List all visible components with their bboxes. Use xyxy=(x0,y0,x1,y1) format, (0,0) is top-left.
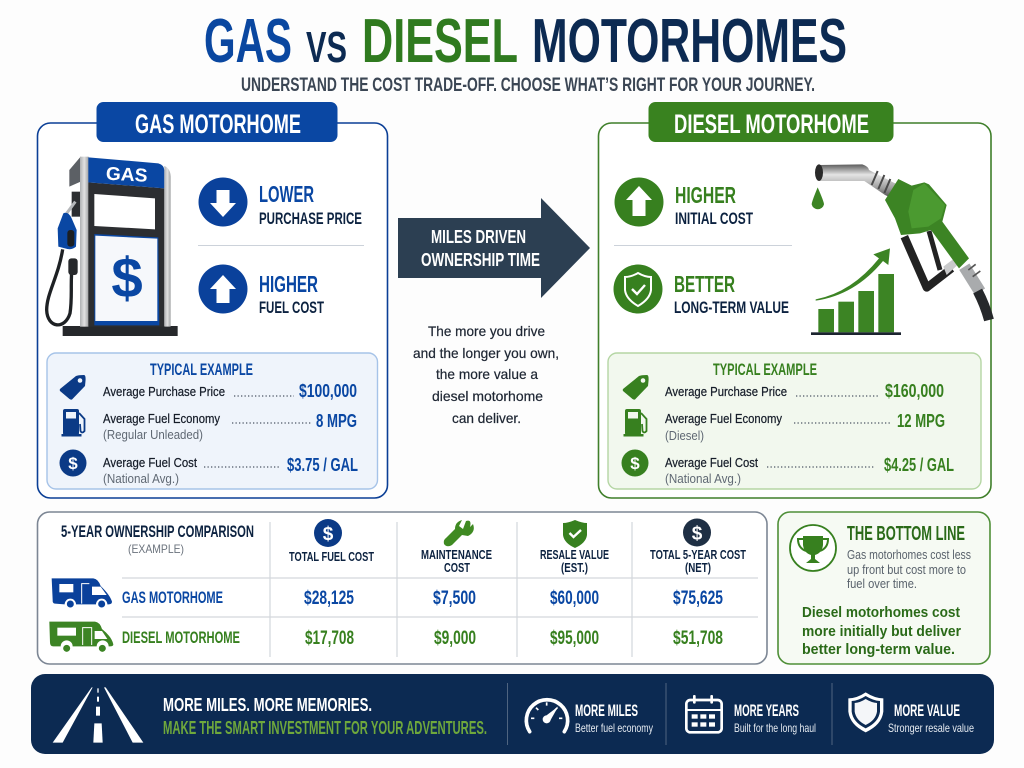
gas typical example box xyxy=(47,353,378,489)
row: gas motorhome: $60,000 xyxy=(550,587,599,609)
column: resale value: (EST.) xyxy=(561,561,588,575)
benefit: lower purchase price: LOWER xyxy=(259,181,314,207)
feature: more miles: Better fuel economy xyxy=(575,721,653,735)
row: purchase price: Average Purchase Price xyxy=(103,384,225,399)
text block: explanation: the more value a xyxy=(436,366,538,382)
text block: diesel summary xyxy=(802,604,961,658)
footer message xyxy=(163,695,487,738)
icon: dollar coin xyxy=(60,450,86,476)
benefit: lower purchase price: PURCHASE PRICE xyxy=(259,209,362,228)
benefit: higher initial cost: HIGHER xyxy=(675,182,736,208)
benefit: better long-term value xyxy=(614,264,789,317)
icon: price tag xyxy=(60,375,86,400)
diesel typical example box: TYPICAL EXAMPLE xyxy=(713,360,817,379)
row: purchase price: $100,000 xyxy=(299,380,357,401)
row: diesel motorhome xyxy=(122,627,723,649)
row: fuel cost: (National Avg.) xyxy=(103,472,179,486)
icon: road xyxy=(53,687,143,743)
text block: diesel summary: better long-term value. xyxy=(802,641,955,658)
row: fuel economy: Average Fuel Economy xyxy=(665,411,782,426)
row: diesel motorhome: $51,708 xyxy=(673,627,723,649)
icon: dollar coin: $ xyxy=(630,454,640,473)
benefit: higher fuel cost xyxy=(198,264,324,317)
column: maintenance cost xyxy=(421,520,492,575)
column: total 5-year cost xyxy=(650,518,746,575)
title xyxy=(204,7,847,76)
row: fuel economy: (Regular Unleaded) xyxy=(103,428,203,442)
row: fuel cost: $4.25 / GAL xyxy=(884,454,954,475)
row: fuel cost: $3.75 / GAL xyxy=(287,454,358,475)
icon: price tag xyxy=(623,375,649,400)
benefit: better long-term value: BETTER xyxy=(674,271,735,297)
row: fuel economy xyxy=(103,410,357,442)
arrow: miles driven, ownership time: OWNERSHIP TIME xyxy=(421,250,540,270)
subtitle: UNDERSTAND THE COST TRADE-OFF. CHOOSE WHAT’S RIGHT FOR YOUR JOURNEY. xyxy=(241,75,815,96)
feature: more value: Stronger resale value xyxy=(888,721,974,735)
row: purchase price: $160,000 xyxy=(885,380,944,401)
row: gas motorhome xyxy=(122,587,723,609)
feature: more miles: MORE MILES xyxy=(575,701,638,720)
row: fuel cost: Average Fuel Cost xyxy=(665,455,758,470)
column: total 5-year cost: $ xyxy=(692,524,703,544)
panel: the bottom line xyxy=(778,512,990,664)
row: fuel economy xyxy=(665,410,945,443)
text block: diesel summary: Diesel motorhomes cost xyxy=(802,604,960,621)
icon: gas motorhome xyxy=(52,578,112,608)
title: MOTORHOMES xyxy=(532,7,847,76)
feature: more miles xyxy=(526,700,653,735)
icon: gas pump xyxy=(47,157,178,336)
footer message: MAKE THE SMART INVESTMENT FOR YOUR ADVENTURES. xyxy=(163,718,487,738)
arrow: miles driven, ownership time xyxy=(398,198,590,298)
benefit: lower purchase price xyxy=(198,178,362,228)
text block: explanation: and the longer you own, xyxy=(413,345,559,361)
feature: more years: MORE YEARS xyxy=(734,701,799,720)
icon: fuel pump xyxy=(62,409,84,436)
benefit: higher fuel cost: HIGHER xyxy=(259,271,318,297)
row: gas motorhome: $28,125 xyxy=(304,587,354,609)
gas typical example box: TYPICAL EXAMPLE xyxy=(150,360,253,379)
icon: diesel motorhome xyxy=(49,622,113,652)
row: purchase price xyxy=(103,380,357,401)
diesel panel header: DIESEL MOTORHOME xyxy=(674,109,869,139)
footer message: MORE MILES. MORE MEMORIES. xyxy=(163,695,372,715)
benefit: higher initial cost: INITIAL COST xyxy=(675,209,753,228)
icon: dollar coin: $ xyxy=(68,454,78,473)
column: total fuel cost: $ xyxy=(323,524,334,545)
icon: rising value chart xyxy=(811,248,901,335)
row: fuel economy: 8 MPG xyxy=(316,410,357,431)
feature: more years xyxy=(686,695,816,735)
text block: explanation: can deliver. xyxy=(452,410,521,426)
title: DIESEL xyxy=(362,7,518,76)
table heading: 5-YEAR OWNERSHIP COMPARISON xyxy=(61,523,254,541)
row: diesel motorhome: $95,000 xyxy=(550,627,599,649)
feature: more value xyxy=(848,692,974,735)
row: gas motorhome: $75,625 xyxy=(673,587,723,609)
column: total fuel cost: TOTAL FUEL COST xyxy=(289,550,374,564)
row: diesel motorhome: $17,708 xyxy=(305,627,354,649)
row: fuel cost xyxy=(665,454,954,486)
benefit: higher fuel cost: FUEL COST xyxy=(259,298,324,317)
row: gas motorhome: $7,500 xyxy=(433,587,476,609)
table heading xyxy=(61,523,254,556)
row: fuel cost xyxy=(103,454,358,486)
icon: gas pump: GAS xyxy=(105,163,148,186)
icon: diesel nozzle xyxy=(812,164,989,320)
row: purchase price xyxy=(665,380,944,401)
benefit: better long-term value: LONG-TERM VALUE xyxy=(674,298,789,317)
footer banner xyxy=(31,674,994,754)
text block: gas summary: up front but cost more to xyxy=(847,563,966,577)
text block: explanation xyxy=(413,323,559,426)
table heading: (EXAMPLE) xyxy=(128,542,184,556)
text block: diesel summary: more initially but deliver xyxy=(802,623,961,640)
icon: dollar coin xyxy=(622,450,648,476)
column: maintenance cost: COST xyxy=(444,561,470,575)
column: total 5-year cost: TOTAL 5-YEAR COST xyxy=(650,548,746,562)
row: gas motorhome: GAS MOTORHOME xyxy=(122,588,223,607)
benefit: higher initial cost xyxy=(614,178,753,228)
column: total fuel cost xyxy=(289,519,374,564)
column: resale value xyxy=(540,520,609,575)
icon: trophy xyxy=(790,525,836,571)
panel: diesel motorhome xyxy=(598,102,991,498)
gas panel header xyxy=(96,102,338,142)
row: diesel motorhome: $9,000 xyxy=(434,627,476,649)
column: resale value: RESALE VALUE xyxy=(540,548,609,562)
feature: more years: Built for the long haul xyxy=(734,721,816,735)
text block: explanation: diesel motorhome xyxy=(432,388,543,404)
row: fuel cost: Average Fuel Cost xyxy=(103,455,197,470)
gas panel header: GAS MOTORHOME xyxy=(135,109,301,139)
row: diesel motorhome: DIESEL MOTORHOME xyxy=(122,628,240,647)
text block: explanation: The more you drive xyxy=(428,323,545,339)
column: maintenance cost: MAINTENANCE xyxy=(421,548,492,562)
icon: gas pump: $ xyxy=(111,247,143,310)
panel: 5-year ownership comparison table xyxy=(38,512,767,664)
icon: fuel pump xyxy=(624,409,646,436)
row: fuel economy: 12 MPG xyxy=(897,410,945,431)
row: fuel economy: (Diesel) xyxy=(665,429,704,443)
text block: gas summary xyxy=(847,548,971,591)
diesel panel header xyxy=(648,102,894,142)
arrow: miles driven, ownership time: MILES DRIVEN xyxy=(431,227,526,247)
diesel typical example box xyxy=(608,353,981,489)
text block: gas summary: fuel over time. xyxy=(847,577,917,591)
title: GAS xyxy=(204,7,292,76)
column: total 5-year cost: (NET) xyxy=(685,561,711,575)
row: fuel economy: Average Fuel Economy xyxy=(103,411,220,426)
panel: gas motorhome xyxy=(38,102,388,498)
row: fuel cost: (National Avg.) xyxy=(665,472,741,486)
feature: more value: MORE VALUE xyxy=(894,701,960,720)
row: purchase price: Average Purchase Price xyxy=(665,384,787,399)
text block: gas summary: Gas motorhomes cost less xyxy=(847,548,971,562)
title: VS xyxy=(306,23,347,72)
